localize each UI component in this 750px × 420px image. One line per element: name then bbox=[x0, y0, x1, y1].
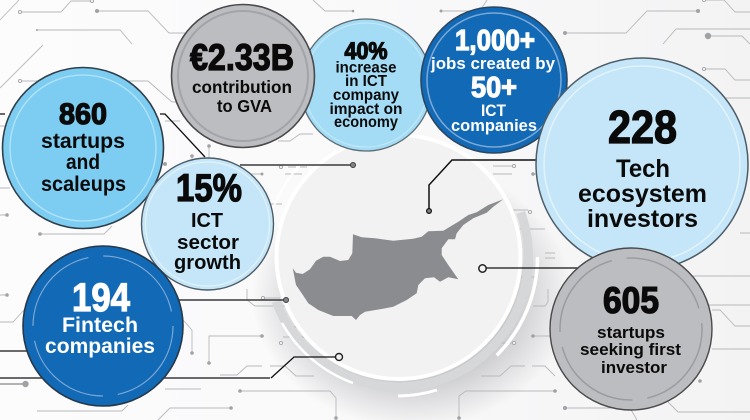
panel: 194 fintech: Fintech bbox=[62, 314, 138, 337]
figure: 228: 228 bbox=[608, 101, 677, 153]
panel: 605 startups: investor bbox=[601, 358, 667, 377]
panel: 40% increase: impact on bbox=[330, 101, 402, 118]
panel: 228 investors: Tech bbox=[616, 155, 670, 183]
panel: EUR 2.33B contribution bbox=[172, 4, 314, 148]
panel: 194 fintech bbox=[23, 246, 183, 406]
panel: 228 investors: investors bbox=[587, 205, 698, 233]
panel: 228 investors: ecosystem bbox=[578, 180, 707, 208]
panel: 40% increase: in ICT bbox=[345, 73, 388, 90]
connector: 228 investors bbox=[427, 160, 540, 213]
panel: 860 startups: and bbox=[66, 151, 100, 174]
panel: 605 startups bbox=[550, 248, 712, 410]
panel: 1,000+ jobs: companies bbox=[451, 117, 537, 135]
panel: 15% growth: growth bbox=[174, 251, 241, 274]
map of Cyprus bbox=[293, 199, 503, 320]
connector: 860 startups bbox=[0, 114, 356, 168]
figure: 50+: 50+ bbox=[471, 72, 517, 104]
connector: 194 fintech bbox=[0, 297, 342, 387]
panel: 1,000+ jobs: jobs created by bbox=[430, 55, 556, 73]
panel: 860 startups: startups bbox=[41, 130, 125, 153]
figure: 40%: 40% bbox=[344, 38, 388, 65]
panel: 40% increase: economy bbox=[334, 114, 398, 131]
figure: 1,000+: 1,000+ bbox=[455, 25, 535, 57]
panel: EUR 2.33B contribution: to GVA bbox=[217, 96, 272, 116]
connector: 605 startups bbox=[479, 265, 585, 272]
panel: 228 investors bbox=[536, 58, 748, 270]
panel: 1,000+ jobs: ICT bbox=[481, 102, 506, 120]
panel: 40% increase: company bbox=[333, 87, 399, 104]
figure: 605: 605 bbox=[603, 280, 659, 321]
panel: 15% growth bbox=[142, 158, 274, 290]
panel: 15% growth: sector bbox=[177, 231, 239, 254]
panel: 15% growth: ICT bbox=[191, 209, 223, 232]
figure: 194: 194 bbox=[72, 276, 131, 320]
central disc with rings bbox=[265, 135, 538, 396]
panel: 860 startups bbox=[2, 68, 164, 228]
panel: 194 fintech: companies bbox=[45, 335, 155, 358]
panel: 40% increase bbox=[300, 19, 432, 151]
panel: EUR 2.33B contribution: contribution bbox=[192, 77, 292, 97]
panel: 1,000+ jobs bbox=[421, 7, 567, 153]
panel: 860 startups: scaleups bbox=[41, 173, 126, 196]
figure: EUR 2.33B: €2.33B bbox=[190, 37, 294, 78]
panel: 605 startups: startups bbox=[597, 323, 665, 342]
panel: 605 startups: seeking first bbox=[580, 340, 681, 359]
figure: 860: 860 bbox=[59, 98, 107, 131]
panel: 40% increase: increase bbox=[336, 60, 397, 76]
figure: 15%: 15% bbox=[176, 167, 242, 210]
